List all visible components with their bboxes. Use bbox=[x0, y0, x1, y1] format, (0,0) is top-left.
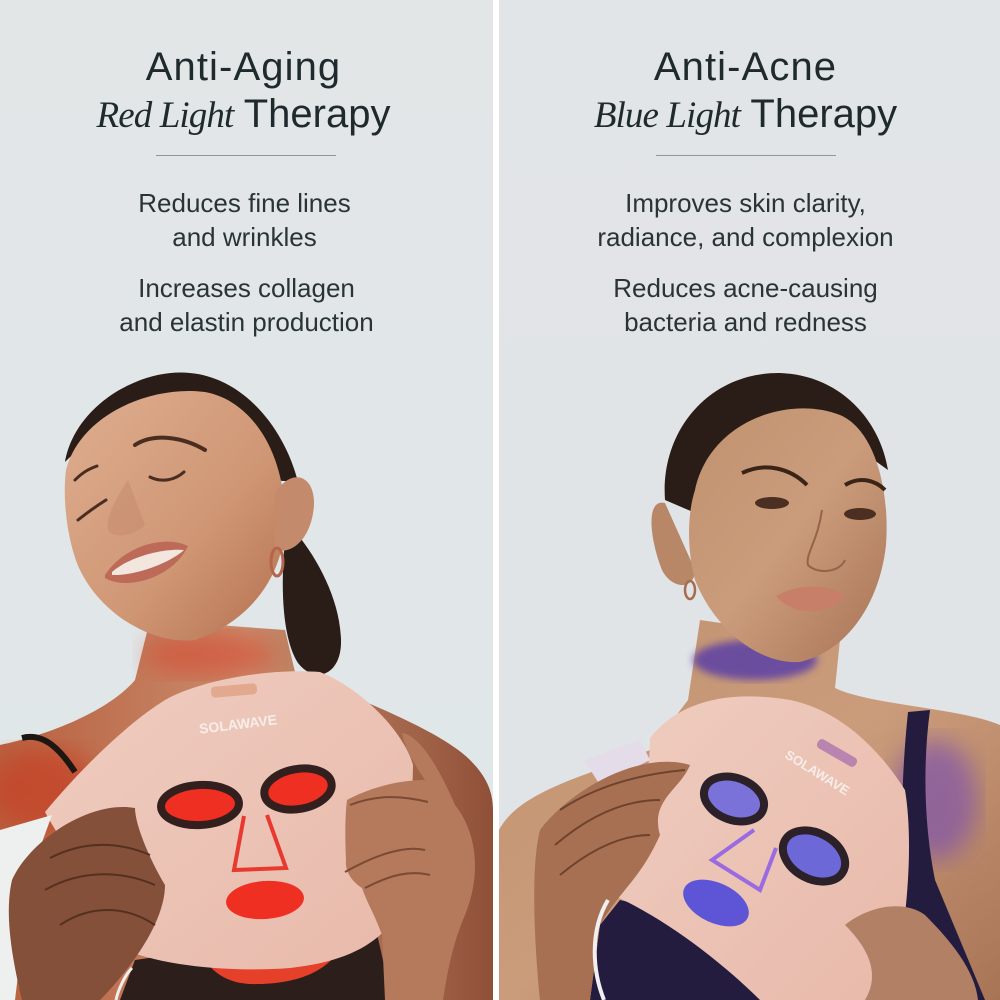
left model: hair bbox=[65, 373, 298, 482]
right mask: nose light bbox=[712, 830, 776, 890]
left model bbox=[0, 373, 493, 1000]
right model bbox=[499, 373, 1000, 1000]
left model: dark top bbox=[120, 925, 392, 1000]
left mask: strap slot bbox=[211, 683, 257, 698]
left benefit 2 bbox=[119, 273, 374, 337]
right model: hair bbox=[665, 373, 888, 515]
right model: earring bbox=[685, 581, 695, 599]
right divider bbox=[656, 155, 836, 156]
right mask bbox=[612, 696, 909, 1000]
right model: right hand bbox=[845, 906, 978, 1000]
right model: ear bbox=[651, 503, 695, 585]
right benefit 1 bbox=[597, 188, 894, 252]
left mask: right eye bbox=[261, 763, 335, 815]
right heading: Anti-Acne bbox=[654, 45, 837, 89]
right model: lips bbox=[776, 587, 846, 611]
left model: earring bbox=[271, 548, 283, 576]
left model: towel bbox=[0, 815, 52, 1000]
right model: white cord bbox=[595, 900, 608, 1000]
left benefit 1 bbox=[138, 188, 351, 252]
left model: right hand bbox=[345, 733, 475, 1000]
left heading: Anti-Aging bbox=[146, 45, 341, 89]
left model: smile bbox=[105, 542, 188, 583]
right benefit 2 bbox=[613, 273, 878, 337]
right model: purple neck glow bbox=[693, 640, 817, 680]
left heading: Red Light Therapy bbox=[97, 92, 390, 136]
right mask: right eye bbox=[774, 820, 854, 892]
left mask: brand: SOLAWAVE bbox=[198, 711, 278, 737]
right mask: body bbox=[612, 696, 909, 1000]
right model: nose bbox=[808, 510, 845, 571]
right model: strap and top bbox=[590, 710, 985, 1000]
left mask bbox=[45, 671, 413, 984]
left mask: nose light bbox=[234, 815, 286, 870]
left mask: lower red glow bbox=[205, 940, 345, 984]
right benefit 1: Improves skin clarity, bbox=[625, 188, 866, 218]
left benefit 1: and wrinkles bbox=[172, 222, 317, 252]
left benefit 1: Reduces fine lines bbox=[138, 188, 351, 218]
left model: face bbox=[65, 391, 285, 641]
right benefit 1: radiance, and complexion bbox=[597, 222, 894, 252]
right model: left hand bbox=[534, 762, 690, 1000]
left mask: left eye bbox=[160, 783, 240, 827]
left heading bbox=[96, 45, 390, 136]
right mask: brand: SOLAWAVE bbox=[782, 747, 852, 798]
left model: ponytail bbox=[283, 535, 341, 675]
left model: ear bbox=[275, 477, 314, 551]
left mask: body bbox=[45, 671, 413, 969]
right mask: left eye bbox=[698, 769, 770, 829]
left divider bbox=[156, 155, 336, 156]
right benefit 2: bacteria and redness bbox=[624, 307, 867, 337]
right benefit 2: Reduces acne-causing bbox=[613, 273, 878, 303]
right model: towel bbox=[584, 740, 650, 785]
left model: white cord bbox=[116, 968, 132, 1000]
left model: left hand bbox=[9, 807, 165, 1000]
right heading: Blue Light Therapy bbox=[594, 92, 897, 136]
left benefit 2: Increases collagen bbox=[138, 273, 355, 303]
right heading bbox=[594, 45, 897, 136]
left model: shoulders and chest bbox=[0, 620, 493, 1000]
left model: red neck glow bbox=[145, 633, 275, 677]
right mask: mouth light bbox=[676, 870, 756, 936]
left model: nose bbox=[107, 480, 145, 535]
right model: face bbox=[689, 408, 887, 662]
left benefit 2: and elastin production bbox=[119, 307, 374, 337]
right model: brows and eyes bbox=[742, 467, 885, 520]
left model: strap bbox=[22, 737, 75, 772]
left model: eyebrows and closed eyes bbox=[75, 438, 205, 520]
right model: shoulders bbox=[499, 620, 1000, 1000]
right mask: strap slot bbox=[815, 738, 859, 768]
left mask: mouth light bbox=[225, 878, 305, 922]
